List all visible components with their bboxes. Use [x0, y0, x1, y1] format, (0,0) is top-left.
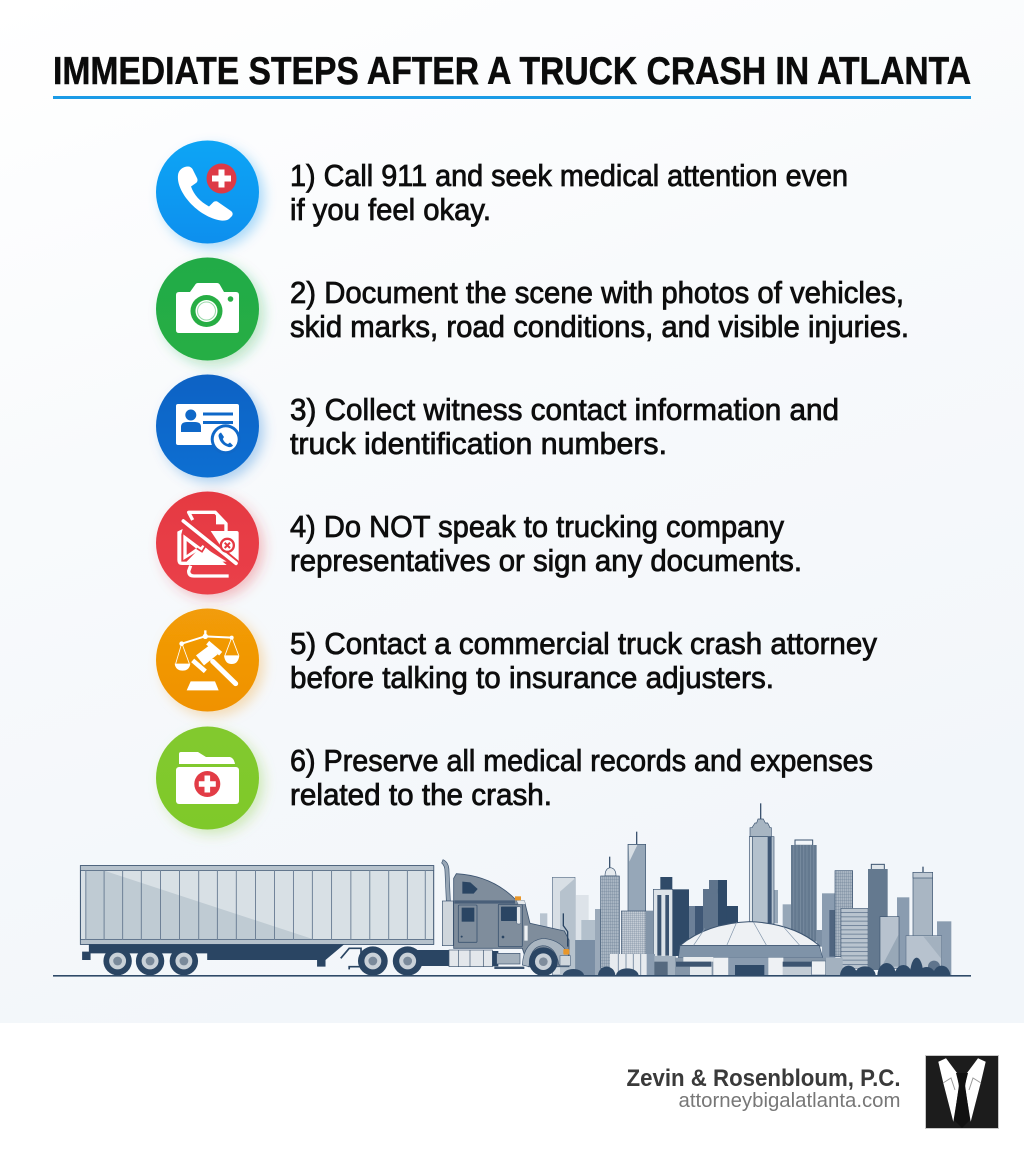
- icon: gavel and scales: [156, 608, 259, 712]
- icon: crossed-out documents and envelope: [156, 492, 259, 594]
- icon: contact card with phone: [156, 374, 259, 478]
- step 6 text: 6) Preserve all medical records and expenses: [290, 743, 873, 778]
- title underline: [53, 96, 971, 99]
- step 4 text: 4) Do NOT speak to trucking company: [290, 509, 784, 544]
- icon: phone with medical cross: [156, 140, 259, 244]
- step 5 text: 5) Contact a commercial truck crash attorney: [290, 626, 877, 661]
- trailer landing gear and drive frame: [341, 948, 452, 969]
- step 4: [156, 492, 802, 594]
- firm website: attorneybigalatlanta.com: [678, 1090, 900, 1112]
- truck cab: [435, 860, 570, 976]
- illustration: semi truck: [80, 860, 570, 976]
- step 1 text: if you feel okay.: [290, 192, 491, 227]
- icon: medical folder: [156, 726, 259, 830]
- step 5 text: before talking to insurance adjusters.: [290, 660, 774, 695]
- step 2: [156, 258, 909, 360]
- truck chassis: [82, 944, 344, 967]
- firm name: Zevin & Rosenbloum, P.C.: [626, 1065, 900, 1092]
- truck trailer: [80, 866, 434, 967]
- step 1: [156, 140, 848, 244]
- step 1 text: 1) Call 911 and seek medical attention even: [290, 158, 848, 193]
- footer band: [0, 1023, 1024, 1154]
- step 2 text: 2) Document the scene with photos of vehicles,: [290, 275, 904, 310]
- step 3 text: 3) Collect witness contact information and: [290, 392, 839, 427]
- truck wheels: [103, 946, 423, 976]
- illustration: Atlanta skyline: [540, 803, 951, 994]
- logo: suit and tie: [926, 1056, 998, 1128]
- step 2 text: skid marks, road conditions, and visible injuries.: [290, 309, 909, 344]
- step 6: [156, 726, 873, 830]
- step 5: [156, 608, 877, 712]
- step 3: [156, 374, 839, 478]
- ground line: [53, 975, 971, 977]
- icon: camera: [156, 258, 259, 360]
- step 3 text: truck identification numbers.: [290, 426, 667, 461]
- step 4 text: representatives or sign any documents.: [290, 543, 802, 578]
- step 6 text: related to the crash.: [290, 777, 552, 812]
